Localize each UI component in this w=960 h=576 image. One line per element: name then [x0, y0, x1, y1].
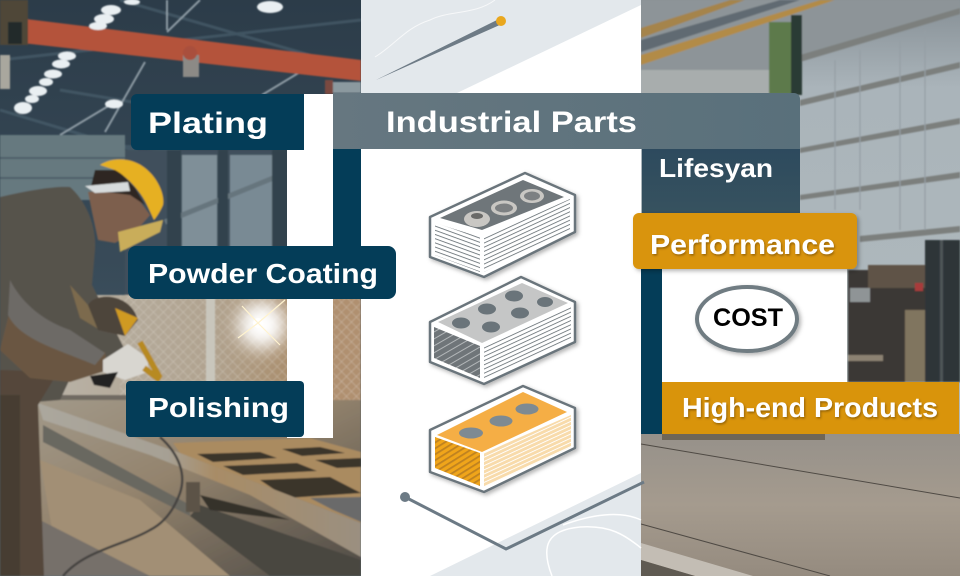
- fence and background: [36, 295, 361, 405]
- icon: part stack in orange: [430, 386, 575, 492]
- floor: [0, 400, 361, 576]
- weld spark: [238, 300, 286, 349]
- label: Polishing: Polishing: [148, 392, 289, 423]
- icon: part stack with perforated top: [430, 277, 575, 384]
- label: Performance: Performance: [650, 229, 835, 260]
- head and hard hat: [88, 188, 150, 243]
- label: Lifespan: Lifesyan: [659, 153, 773, 183]
- bottom grey wedge: [430, 473, 641, 576]
- label: Performance: [633, 213, 857, 269]
- heading: Industrial Parts: Industrial Parts: [386, 106, 637, 139]
- label: Lifespan: [642, 149, 800, 213]
- steel frame: [173, 438, 361, 523]
- top grey wedge: [361, 0, 641, 93]
- decorative pointer line with orange dot: [376, 16, 506, 80]
- label: Powder Coating: Powder Coating: [148, 258, 378, 289]
- worker: [0, 187, 125, 405]
- photo: factory hall with machinery (right): [641, 0, 960, 576]
- label: Plating: [131, 94, 304, 150]
- photo: welder in factory hall (left): [0, 0, 361, 576]
- white backing blocks beside the left labels: [287, 94, 333, 438]
- red crane beam: [18, 18, 361, 81]
- heading: Industrial Parts: [333, 93, 800, 149]
- label: Polishing: [126, 381, 304, 437]
- teal connector column: [333, 149, 361, 249]
- label: High-end Products: [662, 382, 959, 434]
- icon: part stack with grey top and rings: [430, 173, 575, 277]
- panel: white backing for cost: [662, 269, 847, 382]
- panel: central white column: [361, 0, 641, 576]
- teal side bar (right): [641, 269, 662, 434]
- ceiling lights: [14, 0, 283, 114]
- connector line with end dot: [400, 482, 644, 549]
- callout: COST oval: COST: [713, 304, 783, 332]
- label: Powder Coating: [128, 246, 396, 299]
- callout: COST oval: [697, 287, 797, 351]
- label: Plating: Plating: [148, 107, 268, 140]
- label: High-end Products: High-end Products: [682, 392, 938, 423]
